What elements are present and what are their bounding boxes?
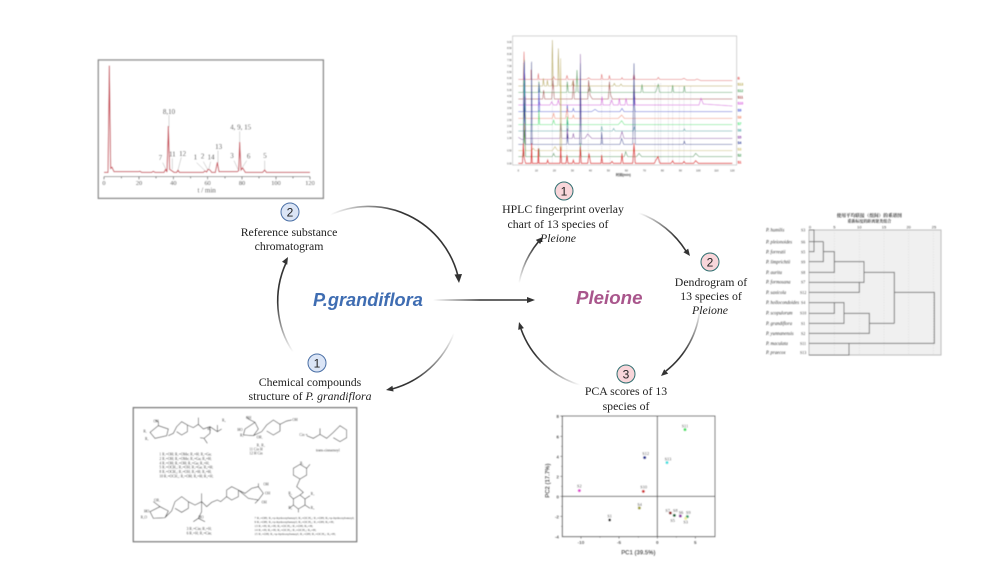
panel: PCA scores plot: S6 xyxy=(679,510,684,515)
panel: PCA scores plot: PC2 (17.7%) xyxy=(546,464,552,498)
panel: HPLC fingerprint overlay chart: 4.00 xyxy=(507,102,512,104)
panel: dendrogram: P. hollocondoides xyxy=(765,301,799,306)
panel: dendrogram: P. humilis xyxy=(765,228,784,233)
panel: dendrogram: S5 xyxy=(801,249,805,254)
panel: dendrogram: S4 xyxy=(801,300,805,305)
label: dendrogram: Dendrogram of xyxy=(675,275,747,289)
panel: PCA scores plot: S2 xyxy=(577,484,582,489)
panel: reference substance chromatogram: 3 xyxy=(230,152,234,160)
panel: HPLC fingerprint overlay chart: 7.00 xyxy=(507,66,512,68)
panel: dendrogram: P. maculata xyxy=(765,342,789,347)
panel: dendrogram: S3 xyxy=(801,227,805,232)
panel: HPLC fingerprint overlay chart: S11 xyxy=(737,95,743,99)
panel: HPLC fingerprint overlay chart: 8.00 xyxy=(507,54,512,56)
panel: reference substance chromatogram: 60 xyxy=(205,180,211,187)
panel: PCA scores plot: S9 xyxy=(686,510,691,515)
panel: PCA scores plot: 6 xyxy=(556,434,559,439)
arrow: HPLC to dendrogram xyxy=(639,213,690,256)
panel: PCA scores plot: S7 xyxy=(665,508,671,513)
label: chemical compounds structure: structure of P. grandiflora xyxy=(248,389,372,403)
panel: chemical compounds structures: OR₁ xyxy=(154,499,161,503)
panel: chemical compounds structures: Cin = xyxy=(299,433,308,437)
panel: reference substance chromatogram: 120 xyxy=(305,180,315,187)
panel: reference substance chromatogram: 6 xyxy=(247,152,251,160)
panel: dendrogram: 25 xyxy=(932,224,937,229)
panel: chemical compounds structures xyxy=(133,408,357,542)
panel: PCA scores plot: 4 xyxy=(556,454,559,459)
panel: chemical compounds structures: 3 R₁=Cin; R₂=H; xyxy=(187,527,212,531)
panel: PCA scores plot xyxy=(535,413,718,558)
panel: reference substance chromatogram: 80 xyxy=(239,180,245,187)
panel: chemical compounds structures: HO xyxy=(237,428,243,432)
panel: chemical compounds structures: 5 R₁=OCH₃; R₂=OH; R₃=Ga; R₄=H; xyxy=(159,466,213,470)
badge: left 2: 2 xyxy=(287,206,294,220)
panel: HPLC fingerprint overlay chart: 4.50 xyxy=(507,96,512,98)
panel: chemical compounds structures: 11 Cin H xyxy=(249,448,263,452)
panel: reference substance chromatogram: 2 xyxy=(201,153,205,161)
panel: dendrogram: 重新标度的距离聚类组合 xyxy=(847,217,891,223)
structure: dimeric ester xyxy=(150,483,263,522)
badge: right 2 xyxy=(701,253,719,271)
panel: PCA scores plot: S13 xyxy=(665,456,671,461)
panel: dendrogram: P. praecox xyxy=(765,351,787,356)
panel: chemical compounds structures: 15 R₁=OH; R₂=p-hydroxybenzyl; R₃=OH; R₄=OCH₃; R₅=H; xyxy=(254,532,336,536)
label: dendrogram: 13 species of xyxy=(680,289,742,303)
panel: dendrogram: S12 xyxy=(800,290,806,295)
panel: HPLC fingerprint overlay chart: 10 xyxy=(535,168,538,172)
panel: PCA scores plot: S8 xyxy=(673,508,678,513)
panel: dendrogram: 使用平均联接（组间）的系谱图 xyxy=(837,212,902,219)
panel: PCA scores plot: -5 xyxy=(617,540,621,545)
panel: dendrogram: S13 xyxy=(800,350,806,355)
panel: dendrogram xyxy=(765,212,941,356)
badge: right 1: 1 xyxy=(561,184,568,198)
arrow: PCA back to Pleione xyxy=(518,322,580,385)
panel: dendrogram: S1 xyxy=(801,321,805,326)
panel: dendrogram: S9 xyxy=(801,259,805,264)
structure: glucoside ester xyxy=(150,418,222,443)
panel: reference substance chromatogram: 5 xyxy=(263,152,267,160)
panel: PCA scores plot: S5 xyxy=(670,518,675,523)
panel: HPLC fingerprint overlay chart: S7 xyxy=(737,122,742,126)
panel: chemical compounds structures: OH xyxy=(292,418,298,422)
panel: chemical compounds structures: OH xyxy=(246,416,252,420)
panel: reference substance chromatogram: 0 xyxy=(102,180,106,187)
panel: HPLC fingerprint overlay chart: 7.50 xyxy=(507,60,512,62)
panel: dendrogram: 15 xyxy=(882,224,887,229)
panel: HPLC fingerprint overlay chart: 5.50 xyxy=(507,84,512,86)
panel: chemical compounds structures: HO xyxy=(144,509,150,513)
panel: chemical compounds structures: R₃ xyxy=(311,492,315,496)
panel: reference substance chromatogram: 12 xyxy=(179,150,187,158)
panel: HPLC fingerprint overlay chart: S12 xyxy=(737,89,743,93)
panel: HPLC fingerprint overlay chart: 6.50 xyxy=(507,72,512,74)
panel: HPLC fingerprint overlay chart: 30 xyxy=(571,168,574,172)
panel: HPLC fingerprint overlay chart: S9 xyxy=(737,108,742,112)
panel: HPLC fingerprint overlay chart: 2.00 xyxy=(507,126,512,128)
panel: chemical compounds structures: OH xyxy=(262,500,267,504)
arrow: reference chromatogram to centre xyxy=(330,206,462,283)
panel: HPLC fingerprint overlay chart: 90 xyxy=(679,168,682,172)
panel: reference substance chromatogram: t / min xyxy=(198,187,216,195)
panel: chemical compounds structures: OH xyxy=(153,419,159,423)
panel: chemical compounds structures: R₁ xyxy=(300,461,304,465)
arrow: centre to compounds xyxy=(386,333,454,392)
panel: chemical compounds structures: OR₁ xyxy=(257,435,264,439)
panel: dendrogram: P. scopulorum xyxy=(765,312,793,317)
panel: chemical compounds structures: R₄ xyxy=(288,506,293,510)
panel: dendrogram: P. aurita xyxy=(765,271,783,276)
badge: right 1 xyxy=(555,182,573,200)
panel: dendrogram: P. formosana xyxy=(765,281,791,286)
panel: chemical compounds structures: 4 R₁=OH; R₂=OH; R₃=Ga; R₄=H; xyxy=(159,461,209,465)
panel: chemical compounds structures: 10 R₁=OCH₃; R₂=OH; R₃=H; R₄=H; xyxy=(159,474,213,478)
panel: HPLC fingerprint overlay chart: S8 xyxy=(737,116,742,120)
panel: reference substance chromatogram: 40 xyxy=(170,180,176,187)
panel: HPLC fingerprint overlay chart: 1.50 xyxy=(507,132,512,134)
arrow: compounds to chromatogram xyxy=(278,257,293,352)
arrow: P.grandiflora to Pleione xyxy=(433,297,535,303)
label: PCA scores: species of xyxy=(603,399,649,413)
panel: chemical compounds structures: 1 R₁=OH; R₂=OMe; R₃=H; R₄=Ga; xyxy=(159,452,212,456)
panel: PCA scores plot: -4 xyxy=(555,535,559,540)
panel: HPLC fingerprint overlay chart: 1.00 xyxy=(507,138,512,140)
label: HPLC fingerprint: HPLC fingerprint overlay xyxy=(502,202,624,216)
panel: dendrogram: 20 xyxy=(906,224,912,229)
heading: P.grandiflora: P.grandiflora xyxy=(313,290,423,310)
panel: HPLC fingerprint overlay chart: S6 xyxy=(737,128,742,132)
label: HPLC fingerprint: chart of 13 species of xyxy=(508,217,609,231)
panel: PCA scores plot: -10 xyxy=(578,540,585,545)
panel: reference substance chromatogram: 100 xyxy=(271,180,281,187)
structure: bibenzyl xyxy=(289,464,310,512)
structure: cinnamoyl xyxy=(307,426,347,442)
panel: HPLC fingerprint overlay chart: B xyxy=(737,76,740,80)
badge: right 3: 3 xyxy=(623,368,630,382)
panel: chemical compounds structures: R₂O xyxy=(141,515,147,519)
panel: reference substance chromatogram xyxy=(98,60,323,198)
panel: chemical compounds structures: trans-cinnamoyl xyxy=(316,449,340,453)
panel: HPLC fingerprint overlay chart: S1 xyxy=(737,160,742,164)
panel: HPLC fingerprint overlay chart: 5.00 xyxy=(507,90,512,92)
panel: HPLC fingerprint overlay chart: 0.50 xyxy=(507,151,512,153)
panel: dendrogram: P. grandiflora xyxy=(765,322,793,327)
panel: dendrogram: S7 xyxy=(801,280,805,285)
panel: chemical compounds structures: R₅ xyxy=(311,506,315,510)
panel: HPLC fingerprint overlay chart: 8.50 xyxy=(507,48,512,50)
panel: HPLC fingerprint overlay chart: 时间(min) xyxy=(616,172,631,177)
panel: PCA scores plot: S11 xyxy=(682,423,688,428)
panel: HPLC fingerprint overlay chart: 110 xyxy=(714,168,719,172)
panel: PCA scores plot: 5 xyxy=(694,540,697,545)
panel: dendrogram: S6 xyxy=(801,239,805,244)
label: HPLC fingerprint: Pleione xyxy=(539,231,576,245)
panel: HPLC fingerprint overlay chart: 2.50 xyxy=(507,120,512,122)
panel: chemical compounds structures: 8 R₁=OCH₃; R₂=OH; R₃=H; R₄=H; xyxy=(159,470,212,474)
panel: dendrogram: P. saxicola xyxy=(765,291,787,296)
panel: HPLC fingerprint overlay chart: 6.00 xyxy=(507,78,512,80)
panel: PCA scores plot: 8 xyxy=(556,414,559,419)
panel: PCA scores plot: 0 xyxy=(556,494,559,499)
panel: HPLC fingerprint overlay chart: 3.50 xyxy=(507,108,512,110)
label: PCA scores: PCA scores of 13 xyxy=(585,384,667,398)
panel: dendrogram: P. forrestii xyxy=(765,250,786,255)
panel: HPLC fingerprint overlay chart: S5 xyxy=(737,135,742,139)
panel: HPLC fingerprint overlay chart xyxy=(507,36,743,177)
panel: dendrogram: S10 xyxy=(800,311,806,316)
panel: HPLC fingerprint overlay chart: 50 xyxy=(607,168,610,172)
panel: HPLC fingerprint overlay chart: 80 xyxy=(661,168,664,172)
panel: PCA scores plot: PC1 (39.5%) xyxy=(621,551,655,557)
panel: chemical compounds structures: OH xyxy=(263,483,269,487)
panel: PCA scores plot: 0 xyxy=(656,540,659,545)
panel: HPLC fingerprint overlay chart: 100 xyxy=(696,168,701,172)
panel: PCA scores plot: S10 xyxy=(640,485,647,490)
panel: reference substance chromatogram: 1 xyxy=(194,153,198,161)
structure: glucoside alcohol xyxy=(243,417,292,436)
panel: HPLC fingerprint overlay chart: 0.00 xyxy=(507,163,512,165)
panel: HPLC fingerprint overlay chart: S10 xyxy=(737,102,743,106)
panel: chemical compounds structures: R₂ xyxy=(288,491,293,495)
panel: HPLC fingerprint overlay chart: 60 xyxy=(625,168,628,172)
panel: chemical compounds structures: 7 R₁=OH; R₂=p-hydroxybenzyl; R₃=OCH₃; R₄=OH; R₅=p-hydroxybenzyl; xyxy=(254,516,354,520)
panel: PCA scores plot: S3 xyxy=(683,520,688,525)
label: reference substance chromatogram: chromatogram xyxy=(255,239,323,253)
panel: HPLC fingerprint overlay chart: S2 xyxy=(737,154,742,158)
panel: reference substance chromatogram: 14 xyxy=(208,153,215,161)
heading: Pleione: Pleione xyxy=(576,287,642,308)
panel: PCA scores plot: -2 xyxy=(555,514,559,519)
label: chemical compounds structure: Chemical compounds xyxy=(259,375,362,389)
panel: chemical compounds structures: 13 R₁=H; R₂=H; R₃=OCH₃; R₄=OH; R₅=H; xyxy=(254,524,313,528)
panel: chemical compounds structures: HO xyxy=(198,515,204,519)
panel: chemical compounds structures: OH xyxy=(265,491,271,495)
panel: dendrogram: P. pleionoides xyxy=(765,240,792,245)
panel: chemical compounds structures: 6 R₁=H; R₂=Cin; xyxy=(187,531,212,535)
panel: chemical compounds structures: 14 R₁=H; R₂=H; R₃=OCH₃; R₄=OCH₃; R₅=H; xyxy=(254,528,316,532)
panel: PCA scores plot: S12 xyxy=(642,451,649,456)
panel: HPLC fingerprint overlay chart: 3.00 xyxy=(507,114,512,116)
arrow: dendrogram to PCA xyxy=(661,308,700,376)
label: dendrogram: Pleione xyxy=(691,303,728,317)
panel: HPLC fingerprint overlay chart: S4 xyxy=(737,141,742,145)
panel: dendrogram: S11 xyxy=(800,341,806,346)
panel: chemical compounds structures: R₂ xyxy=(145,437,149,441)
badge: left 2 xyxy=(281,203,299,221)
label: reference substance chromatogram: Reference substance xyxy=(241,225,337,239)
badge: left 1: 1 xyxy=(314,356,321,370)
panel: PCA scores plot: S4 xyxy=(637,502,643,507)
panel: reference substance chromatogram: 8,10 xyxy=(163,108,176,116)
badge: right 3 xyxy=(617,365,635,383)
panel: HPLC fingerprint overlay chart: 9.00 xyxy=(507,42,512,44)
badge: right 2: 2 xyxy=(707,256,714,270)
panel: dendrogram: 5 xyxy=(833,224,836,229)
panel: HPLC fingerprint overlay chart: 20 xyxy=(553,168,556,172)
arrow: to HPLC fingerprint xyxy=(519,237,543,283)
panel: HPLC fingerprint overlay chart: 120 xyxy=(730,168,735,172)
panel: dendrogram: P. yunnanensis xyxy=(765,332,794,337)
panel: HPLC fingerprint overlay chart: 70 xyxy=(643,168,646,172)
panel: reference substance chromatogram: 20 xyxy=(136,180,142,187)
panel: dendrogram: 0 xyxy=(809,224,812,229)
panel: dendrogram: P. limprichtii xyxy=(765,260,791,265)
panel: dendrogram: S2 xyxy=(801,331,805,336)
panel: reference substance chromatogram: 7 xyxy=(159,154,163,162)
panel: chemical compounds structures: R₁ xyxy=(143,430,148,434)
badge: left 1 xyxy=(308,354,326,372)
panel: reference substance chromatogram: 4, 9, 15 xyxy=(230,123,252,131)
panel: HPLC fingerprint overlay chart: 0 xyxy=(518,168,520,172)
panel: chemical compounds structures: 9 R₁=OH; R₂=p-hydroxybenzyl; R₃=OCH₃; R₄=OH; R₅=H; xyxy=(254,520,334,524)
panel: chemical compounds structures: R₅ xyxy=(207,427,212,431)
panel: chemical compounds structures: R₁ R₂ xyxy=(257,444,266,448)
panel: chemical compounds structures: 12 H Cin xyxy=(249,451,263,455)
panel: dendrogram: 10 xyxy=(857,224,862,229)
panel: reference substance chromatogram: 11 xyxy=(169,151,176,159)
panel: chemical compounds structures: R₂ xyxy=(240,434,244,438)
panel: chemical compounds structures: R₄ xyxy=(222,419,226,423)
panel: reference substance chromatogram: 13 xyxy=(215,143,223,151)
panel: chemical compounds structures: 2 R₁=OH; R₂=OMe; R₃=Ga; R₄=H; xyxy=(159,457,212,461)
panel: HPLC fingerprint overlay chart: S13 xyxy=(737,83,743,87)
panel: PCA scores plot: 2 xyxy=(556,474,559,479)
panel: HPLC fingerprint overlay chart: 40 xyxy=(589,168,592,172)
panel: PCA scores plot: S1 xyxy=(607,514,612,519)
panel: dendrogram: S8 xyxy=(801,270,805,275)
panel: HPLC fingerprint overlay chart: S3 xyxy=(737,147,742,151)
